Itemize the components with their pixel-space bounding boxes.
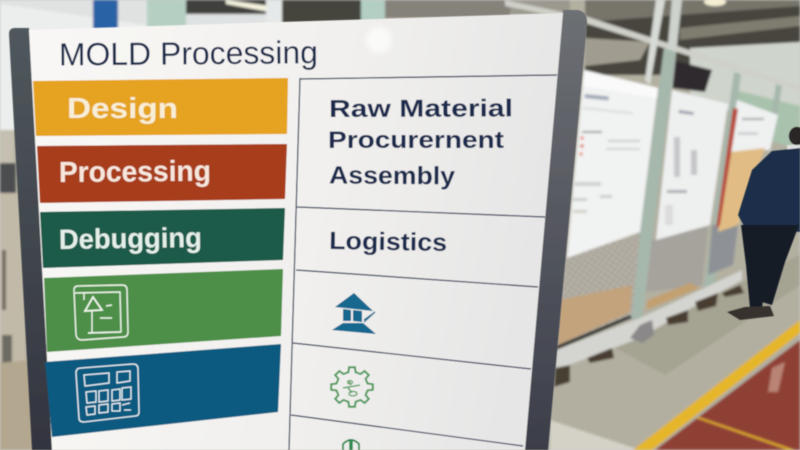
icon: gear [331,367,373,407]
vertical frame posts [628,0,782,320]
ceiling [585,0,800,75]
bar: Processing: Processing [59,156,211,189]
person right leg [762,225,799,305]
person shoe [727,306,774,320]
table rules [289,75,557,450]
glare highlight [366,27,392,53]
bar: Design: Design [67,93,178,125]
icon: partial green symbol [343,439,359,450]
right gray post [525,10,587,450]
icon: blueprint [74,285,128,340]
text: Assembly: Assembly [329,162,455,190]
icon: calculator [76,364,139,422]
left white wall [0,0,150,450]
text: Procurernent: Procurernent [328,127,504,154]
person collar [787,145,800,149]
text: Raw Material: Raw Material [329,95,513,123]
bar: blue with calculator icon [45,344,281,437]
person in navy suit [727,127,800,320]
person left leg [741,225,772,308]
back green wall [690,42,800,130]
bar: green with blueprint icon [44,269,283,352]
person jacket [738,148,800,232]
floor [548,240,800,450]
red floor area [655,340,800,450]
sign board [9,10,587,450]
right table [289,75,557,450]
upper dark windows [186,0,570,28]
display panel 3 [716,100,778,232]
top rail [585,16,800,91]
pale green column [147,0,186,30]
text: Logistics: Logistics [329,227,447,257]
bar: Design [33,78,288,136]
display panel 1 [567,70,658,258]
person head [789,127,800,145]
sign face [29,13,563,450]
display panel 2 [656,90,728,240]
bar: Debugging [40,208,285,268]
title: MOLD Processing [59,34,318,72]
left gray post [9,28,52,450]
bar: Debugging: Debugging [59,222,202,255]
yellow floor stripe [633,320,800,450]
icon: house [332,293,376,334]
blue post [93,0,118,30]
display cabinet lower part [554,225,744,387]
bar: Processing [37,144,287,203]
